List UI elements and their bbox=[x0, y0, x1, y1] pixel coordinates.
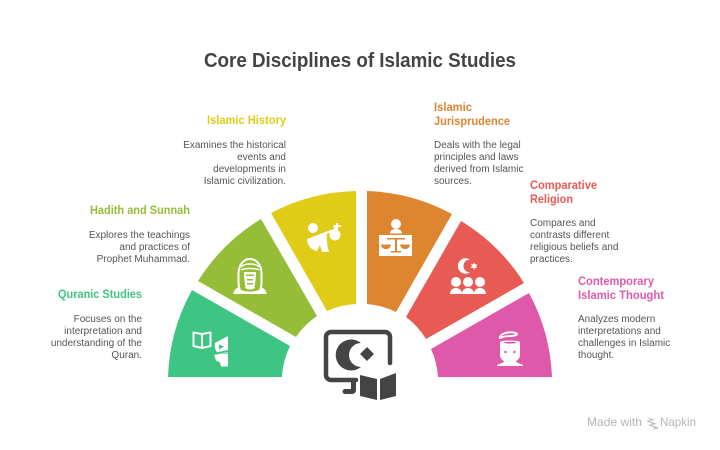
text block: Contemporary Islamic Thought: Analyzes modern bbox=[578, 314, 655, 325]
text block: Comparative Religion: religious beliefs and bbox=[530, 242, 618, 253]
text block: Islamic History: Islamic History bbox=[207, 113, 286, 127]
icon: crescent, star and people bbox=[450, 258, 486, 294]
text block: Contemporary Islamic Thought: interpretations and bbox=[578, 326, 661, 337]
text block: Islamic Jurisprudence: Islamic bbox=[434, 100, 472, 114]
wedge: Islamic History bbox=[271, 191, 356, 311]
icon: bearded man in headdress bbox=[234, 259, 266, 294]
credit: Made with Napkin: Napkin bbox=[660, 415, 696, 429]
text block: Quranic Studies: Quranic Studies bbox=[58, 287, 142, 301]
text block: Quranic Studies: Focuses on the bbox=[74, 314, 142, 325]
icon: head with halo bbox=[497, 331, 523, 366]
credit: Made with Napkin: Made with bbox=[587, 415, 642, 429]
icon: judge with scales bbox=[379, 219, 412, 256]
text block: Quranic Studies: Quran. bbox=[111, 350, 142, 361]
icon: traveller with bundle bbox=[307, 223, 341, 252]
credit: Made with Napkin bbox=[587, 415, 696, 430]
text block: Islamic History: events and bbox=[237, 152, 286, 163]
wedge: Islamic Jurisprudence bbox=[367, 191, 452, 312]
text block: Islamic History bbox=[183, 113, 286, 187]
text block: Comparative Religion: Compares and bbox=[530, 218, 596, 229]
text block: Contemporary Islamic Thought: Islamic Thought bbox=[578, 288, 664, 302]
text block: Islamic Jurisprudence: principles and laws bbox=[434, 152, 518, 163]
text block: Islamic History: Examines the historical bbox=[183, 140, 286, 151]
wedge: Quranic Studies bbox=[168, 290, 290, 377]
text block: Contemporary Islamic Thought: thought. bbox=[578, 350, 614, 361]
text block: Islamic Jurisprudence: Deals with the legal bbox=[434, 140, 521, 151]
text block: Islamic Jurisprudence: sources. bbox=[434, 176, 472, 187]
text block: Quranic Studies: interpretation and bbox=[64, 326, 142, 337]
text block: Islamic Jurisprudence: derived from Islamic bbox=[434, 164, 523, 175]
text block: Hadith and Sunnah: and practices of bbox=[119, 242, 190, 253]
wedge: Comparative Religion bbox=[406, 221, 524, 339]
text block: Comparative Religion: practices. bbox=[530, 254, 573, 265]
text block: Contemporary Islamic Thought: challenges in Islamic bbox=[578, 338, 670, 349]
text block: Quranic Studies: understanding of the bbox=[51, 338, 142, 349]
text block: Islamic Jurisprudence bbox=[434, 100, 523, 187]
text block: Comparative Religion bbox=[530, 178, 618, 265]
text block: Hadith and Sunnah: Prophet Muhammad. bbox=[97, 254, 190, 265]
text block: Hadith and Sunnah bbox=[89, 203, 190, 265]
text block: Quranic Studies bbox=[51, 287, 142, 361]
text block: Hadith and Sunnah: Hadith and Sunnah bbox=[90, 203, 190, 217]
text block: Comparative Religion: contrasts different bbox=[530, 230, 610, 241]
text block: Comparative Religion: Comparative bbox=[530, 178, 597, 192]
text block: Comparative Religion: Religion bbox=[530, 192, 573, 206]
text block: Islamic History: Islamic civilization. bbox=[204, 176, 286, 187]
icon: open book and reader bbox=[194, 332, 228, 366]
text block: Contemporary Islamic Thought bbox=[578, 274, 670, 361]
text block: Hadith and Sunnah: Explores the teachings bbox=[89, 230, 190, 241]
text block: Contemporary Islamic Thought: Contemporary bbox=[578, 274, 654, 288]
text block: Islamic Jurisprudence: Jurisprudence bbox=[434, 114, 510, 128]
title: Core Disciplines of Islamic Studies bbox=[204, 50, 516, 72]
wedge: Hadith and Sunnah bbox=[198, 219, 317, 337]
icon: central monitor with crescent and book bbox=[326, 332, 396, 400]
wedge: Contemporary Islamic Thought bbox=[431, 293, 552, 377]
text block: Islamic History: developments in bbox=[213, 164, 286, 175]
